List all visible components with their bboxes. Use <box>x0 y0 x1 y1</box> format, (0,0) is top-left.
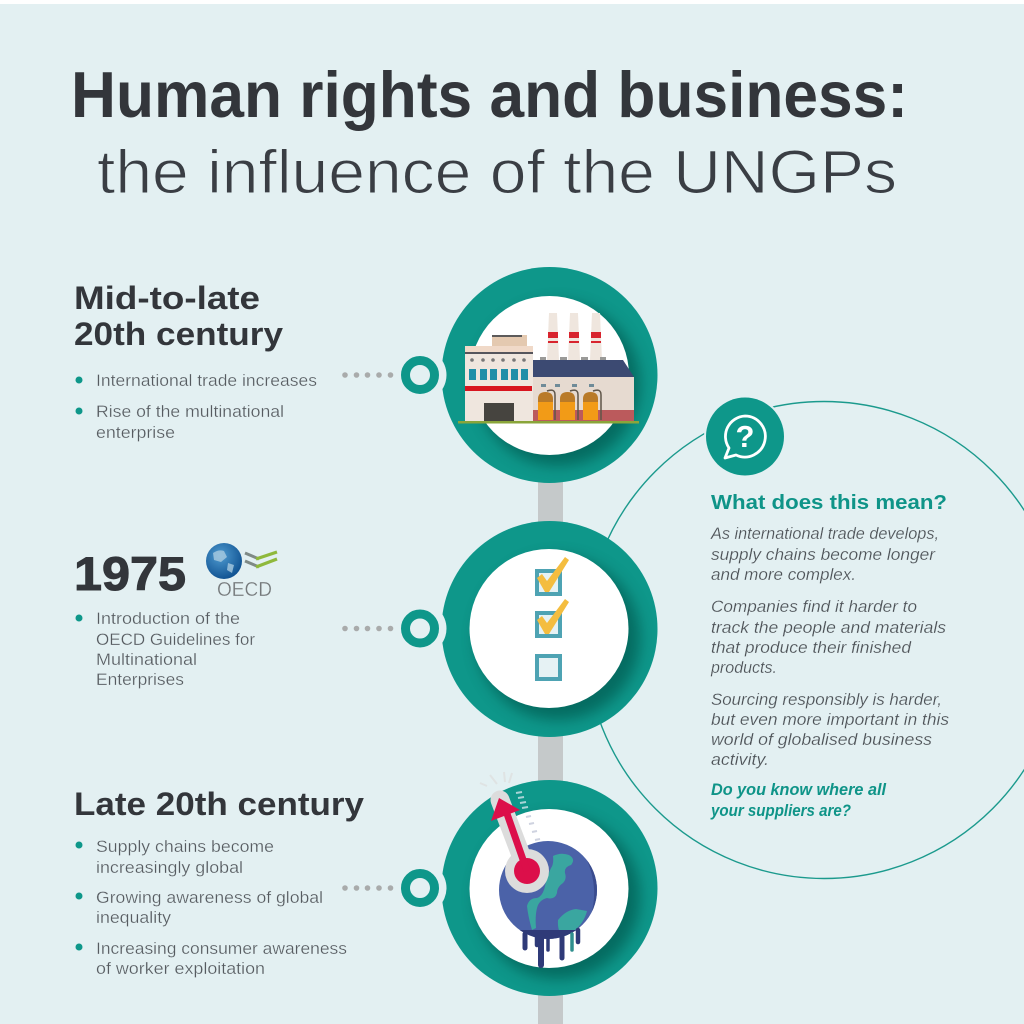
rays <box>480 772 512 786</box>
icon: question speech bubble <box>704 396 786 478</box>
callout outline circle <box>586 402 1024 878</box>
section 1 bullets <box>76 372 317 442</box>
section 3 bullets <box>76 838 347 978</box>
text block: paragraph 3 <box>711 691 949 769</box>
text block: paragraph 2: products. <box>710 659 777 677</box>
icon: melting globe and thermometer <box>480 772 606 965</box>
section 2 bullets: OECD Guidelines for <box>96 631 256 649</box>
section 3 bullets: of worker exploitation <box>96 960 265 978</box>
text block: paragraph 2: Companies find it harder to <box>711 598 917 616</box>
section 2 heading: 1975: 1975 <box>74 547 186 600</box>
section 3 bullets: Increasing consumer awareness <box>96 940 347 958</box>
section 1 heading: 20th century <box>74 316 283 352</box>
section 2 bullets: Multinational <box>96 651 197 669</box>
text block: paragraph 3: but even more important in this <box>711 711 949 729</box>
text block: paragraph 2 <box>710 598 946 677</box>
connector <box>342 602 446 655</box>
section 1 heading: Mid-to-late <box>74 280 260 316</box>
section 3 heading: Late 20th century <box>74 786 364 822</box>
text block: paragraph 3: activity. <box>711 751 769 769</box>
text block: paragraph 3: world of globalised business <box>711 731 932 749</box>
section 3 bullets: increasingly global <box>96 859 243 877</box>
text block: paragraph 1: and more complex. <box>711 566 856 584</box>
section 2 bullets: Introduction of the <box>96 610 240 628</box>
title: Human rights and business: <box>71 58 908 131</box>
heading: What does this mean? <box>711 492 947 514</box>
text block: paragraph 1: supply chains become longer <box>711 546 937 564</box>
text block: paragraph 1 <box>710 525 939 584</box>
icon: factory <box>458 313 639 424</box>
text block: closing question: Do you know where all <box>711 781 886 799</box>
icon: question speech bubble: ? <box>736 419 754 454</box>
node 3: global warming <box>342 772 658 996</box>
text block: paragraph 2: that produce their finished <box>711 639 912 657</box>
text block: closing question: your suppliers are? <box>710 802 851 820</box>
section 3 bullets: inequality <box>96 909 172 927</box>
title: the influence of the UNGPs <box>97 138 897 206</box>
section 1 bullets: Rise of the multinational <box>96 403 284 421</box>
connector <box>342 862 446 914</box>
section 1 bullets: enterprise <box>96 424 175 442</box>
section 1 heading <box>74 280 283 352</box>
node 1: factory <box>342 267 658 483</box>
section 2 bullets: Enterprises <box>96 671 184 689</box>
section 3 bullets: Supply chains become <box>96 838 274 856</box>
text block: paragraph 1: As international trade develops, <box>710 525 939 543</box>
text block: paragraph 2: track the people and materials <box>711 619 946 637</box>
icon: checklist <box>537 557 569 679</box>
text block: paragraph 3: Sourcing responsibly is harder, <box>711 691 942 709</box>
section 3 bullets: Growing awareness of global <box>96 889 323 907</box>
title <box>71 58 908 206</box>
timeline spine <box>538 470 563 1024</box>
scale ticks <box>516 792 528 808</box>
icon: OECD logo <box>206 543 277 601</box>
section 1 bullets: International trade increases <box>96 372 317 390</box>
text block: closing question <box>710 781 886 820</box>
node 2: checklist <box>342 521 658 737</box>
icon: OECD logo: OECD <box>217 579 272 601</box>
panel: what does this mean <box>586 396 1024 878</box>
section 2 bullets <box>76 610 256 689</box>
connector <box>342 348 446 402</box>
